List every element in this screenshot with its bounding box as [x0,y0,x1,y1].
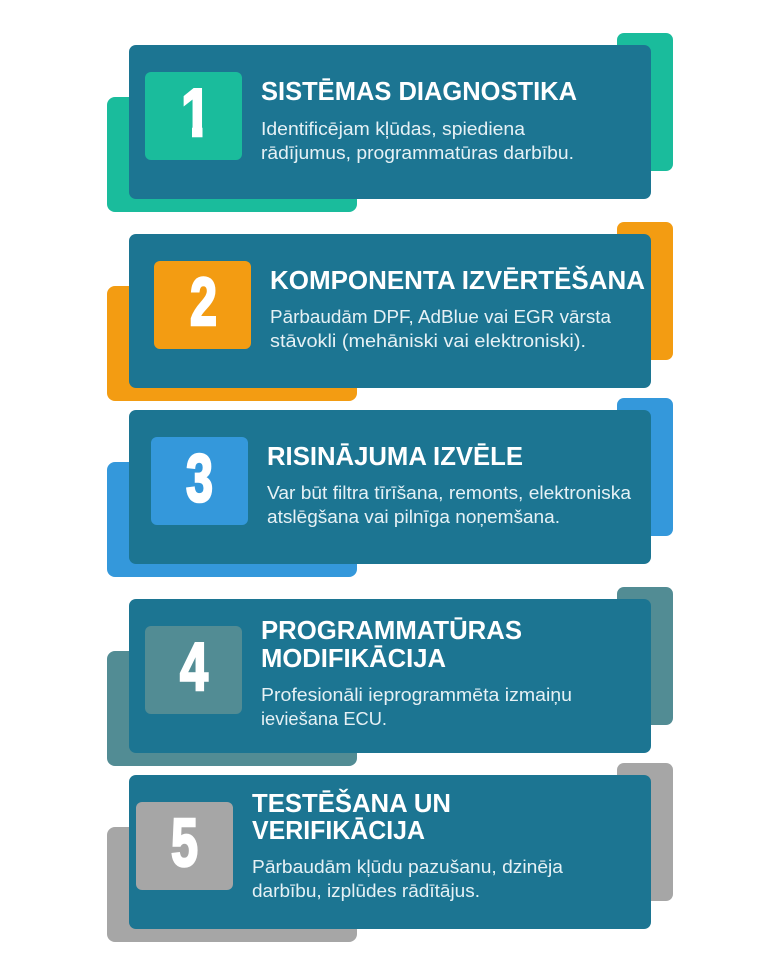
description, step 5: Pārbaudām kļūdu pazušanu, dzinēja [252,857,564,877]
description, step 4: ieviešana ECU. [261,709,387,729]
step 5 panel [107,763,673,942]
card, step 2 [129,234,651,388]
step 1 panel [107,33,673,212]
description, step 3: atslēgšana vai pilnīga noņemšana. [267,507,560,527]
heading, step 5 [252,788,451,845]
step 2 panel [107,222,673,401]
back plate right, step 1 [617,33,673,171]
number badge 2 [154,261,251,349]
heading, step 5: TESTĒŠANA UN [252,788,451,818]
description, step 1 [261,119,574,163]
number badge 3 [151,437,248,525]
back plate right, step 4 [617,587,673,725]
description, step 1: rādījumus, programmatūras darbību. [261,143,574,163]
number badge 5: 5 [171,805,198,881]
heading, step 1: SISTĒMAS DIAGNOSTIKA [261,76,577,106]
back plate right, step 5 [617,763,673,901]
step 4 panel [107,587,673,766]
back plate left, step 3 [107,462,357,577]
number badge 4: 4 [180,629,208,705]
back plate left, step 5 [107,827,357,942]
number badge 5 [136,802,233,890]
description, step 4 [261,685,572,729]
back plate left, step 2 [107,286,357,401]
card, step 5 [129,775,651,929]
heading, step 2: KOMPONENTA IZVĒRTĒŠANA [270,265,645,295]
number badge 2: 2 [190,264,217,340]
heading, step 5: VERIFIKĀCIJA [252,815,425,845]
description, step 1: Identificējam kļūdas, spiediena [261,119,526,139]
description, step 2: Pārbaudām DPF, AdBlue vai EGR vārsta [270,307,612,327]
description, step 5 [252,857,564,901]
description, step 4: Profesionāli ieprogrammēta izmaiņu [261,685,572,705]
back plate left, step 4 [107,651,357,766]
number badge 1 [145,72,242,160]
card, step 4 [129,599,651,753]
description, step 2 [270,307,612,351]
number badge 4 [145,626,242,714]
number badge 3: 3 [186,440,213,516]
back plate left, step 1 [107,97,357,212]
card, step 1 [129,45,651,199]
card, step 3 [129,410,651,564]
step 3 panel [107,398,673,577]
description, step 3 [267,483,632,527]
heading, step 4: PROGRAMMATŪRAS [261,615,522,645]
heading, step 4 [261,615,522,673]
description, step 5: darbību, izplūdes rādītājus. [252,881,480,901]
heading, step 4: MODIFIKĀCIJA [261,643,446,673]
description, step 2: stāvokli (mehāniski vai elektroniski). [270,331,586,351]
heading, step 3: RISINĀJUMA IZVĒLE [267,441,523,471]
back plate right, step 3 [617,398,673,536]
description, step 3: Var būt filtra tīrīšana, remonts, elektroniska [267,483,632,503]
number badge 1: 1 [181,75,211,151]
back plate right, step 2 [617,222,673,360]
